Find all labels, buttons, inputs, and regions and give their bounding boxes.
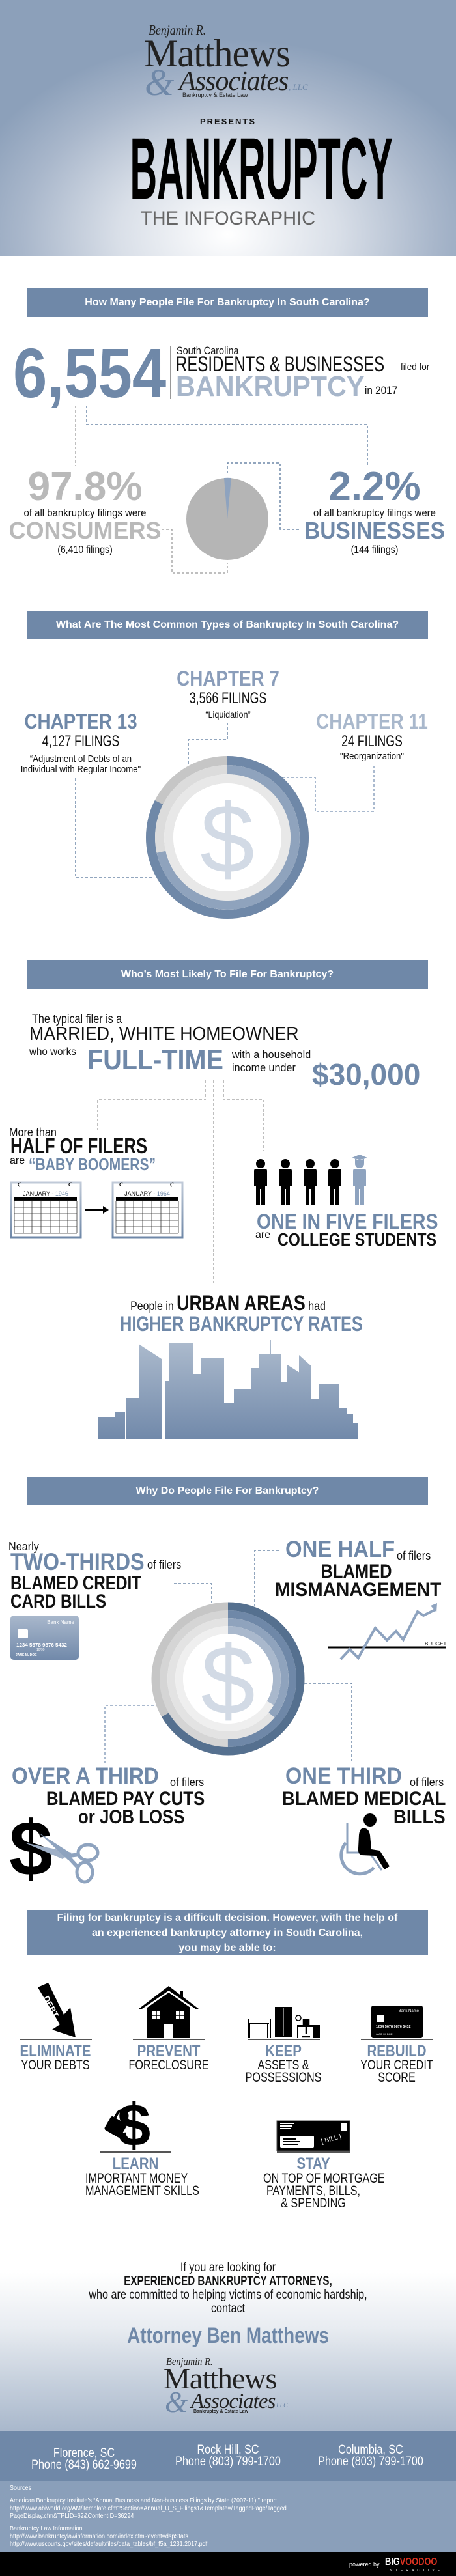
icon: credit card: Bank Name <box>47 1619 74 1625</box>
connectors section 2 <box>75 723 375 878</box>
one half mismanagement: ONE HALF <box>285 1537 395 1562</box>
icon: budget chart: BUDGET <box>425 1641 446 1647</box>
college students: ONE IN FIVE FILERS <box>257 1210 438 1233</box>
sources: Bankruptcy Law Information <box>10 2525 83 2532</box>
icon: credit card: JANE M. DOE <box>16 1653 37 1657</box>
icon: black credit card: 1234 5678 9876 5432 <box>376 2025 411 2029</box>
one third medical <box>282 1763 446 1828</box>
offices band <box>0 2431 456 2481</box>
two-thirds credit card <box>8 1540 181 1612</box>
chapter 7: CHAPTER 7 <box>177 667 279 690</box>
benefit labels row 1: ELIMINATE <box>20 2042 91 2060</box>
typical filer text: who works <box>29 1046 76 1057</box>
benefit labels row 1: PREVENT <box>137 2042 200 2060</box>
chapter 11: CHAPTER 11 <box>316 710 428 733</box>
skyline <box>98 1340 358 1439</box>
benefit labels row 2: PAYMENTS, BILLS, <box>266 2183 360 2198</box>
one half mismanagement: MISMANAGEMENT <box>275 1579 441 1601</box>
one half mismanagement: BLAMED <box>321 1561 392 1582</box>
closing text: contact <box>211 2302 245 2316</box>
connectors section 4 <box>104 1550 352 1763</box>
baby boomers <box>9 1126 156 1174</box>
icon: black credit card <box>361 2006 433 2040</box>
footer logo: , LLC <box>273 2402 288 2409</box>
one half mismanagement: of filers <box>397 1549 431 1562</box>
chapter 11 <box>316 710 428 762</box>
two-thirds credit card: BLAMED CREDIT <box>10 1573 141 1594</box>
one half mismanagement <box>275 1537 442 1601</box>
over a third pay cuts: OVER A THIRD <box>12 1763 159 1789</box>
icon: dollar and scissors <box>9 1805 99 1892</box>
college students <box>255 1210 438 1250</box>
text: residents & businesses: in 2017 <box>365 384 397 397</box>
benefit labels row 2: MANAGEMENT SKILLS <box>85 2183 199 2198</box>
benefit labels row 2: ON TOP OF MORTGAGE <box>263 2171 385 2186</box>
benefit labels row 1: FORECLOSURE <box>128 2058 209 2073</box>
stat: consumers <box>8 464 162 555</box>
icon: locked dollar: $ <box>117 2092 150 2159</box>
connectors section 3 <box>97 1080 264 1283</box>
icon: house <box>133 1986 205 2040</box>
college students: are <box>255 1229 270 1240</box>
baby boomers: are <box>10 1155 25 1166</box>
icon: debt arrow <box>20 1983 92 2040</box>
icon: budget chart <box>328 1603 447 1660</box>
band: types <box>27 611 428 639</box>
benefit labels row 2: STAY <box>296 2155 330 2173</box>
benefit labels row 2: & SPENDING <box>281 2196 346 2211</box>
chapter 13: 4,127 FILINGS <box>42 733 119 750</box>
chapter 13: “Adjustment of Debts of an <box>30 753 132 764</box>
icon: credit card: 10/99 <box>36 1648 45 1652</box>
typical filer text: FULL-TIME <box>87 1044 223 1076</box>
stat: consumers: CONSUMERS <box>8 517 162 544</box>
footer logo: Benjamin R. <box>166 2355 212 2368</box>
reasons donut chart: $ <box>201 1625 255 1735</box>
band: help <box>27 1910 428 1955</box>
icon: debt arrow: DEBT <box>41 1994 61 2019</box>
icon: credit card: 1234 5678 9876 5432 <box>16 1642 67 1648</box>
icon: bill envelope: [ BILL ] <box>321 2133 342 2146</box>
icon: locked dollar <box>100 2092 171 2159</box>
benefit labels row 1 <box>20 2042 433 2085</box>
offices band: Phone (803) 799-1700 <box>318 2455 423 2469</box>
chapter 11: "Reorganization" <box>340 751 404 762</box>
urban areas text <box>120 1291 363 1336</box>
closing text: If you are looking for <box>180 2261 276 2275</box>
offices band: Columbia, SC <box>338 2443 403 2457</box>
icon: bill envelope <box>276 2120 350 2153</box>
one third medical: BLAMED MEDICAL <box>282 1788 446 1810</box>
band: who: Who’s Most Likely To File For Bankruptcy? <box>121 969 334 980</box>
band: help: Filing for bankruptcy is a difficult decision. However, with the help of <box>57 1912 397 1924</box>
stat: businesses: (144 filings) <box>351 544 398 555</box>
one third medical: of filers <box>410 1776 444 1789</box>
text: residents & businesses: BANKRUPTCY <box>176 371 365 402</box>
urban areas text: People in URBAN AREAS had <box>130 1291 326 1315</box>
sources: PageDisplay.cfm&TPLID=62&ContentID=36294 <box>10 2513 134 2520</box>
footer bar: BIGVOODOO <box>385 2556 437 2568</box>
offices band: Phone (843) 662-9699 <box>31 2458 137 2472</box>
calendars: JANUARY - 1946 <box>23 1190 68 1197</box>
sources: http://www.abiworld.org/AM/Template.cfm?Section=Annual_U_S_Filings1&Template=/TaggedPage/Tagged <box>10 2505 287 2512</box>
typical filer text: The typical filer is a <box>32 1013 122 1026</box>
two-thirds credit card: of filers <box>147 1558 181 1571</box>
icon: dollar and scissors: $ <box>9 1805 53 1892</box>
text: residents & businesses: RESIDENTS & BUSINESSES <box>176 352 384 376</box>
band: types: What Are The Most Common Types of Bankruptcy In South Carolina? <box>56 619 399 630</box>
footer logo: Associates <box>191 2390 275 2413</box>
two-thirds credit card: TWO-THIRDS <box>10 1548 145 1575</box>
icon: furniture <box>248 2007 320 2040</box>
typical filer text: MARRIED, WHITE HOMEOWNER <box>29 1024 299 1044</box>
chapter 7 <box>177 667 279 720</box>
attorney name: Attorney Ben Matthews <box>127 2323 329 2348</box>
presents: PRESENTS <box>200 117 256 126</box>
logo: Matthews & Associates: Associates <box>179 66 288 96</box>
stat: businesses <box>304 464 445 555</box>
stat: businesses: BUSINESSES <box>304 517 445 544</box>
over a third pay cuts: of filers <box>170 1776 204 1789</box>
offices band: Florence, SC <box>53 2446 115 2460</box>
two-thirds credit card: Nearly <box>8 1540 39 1553</box>
baby boomers: More than <box>9 1126 57 1139</box>
stat: businesses: 2.2% <box>328 464 421 509</box>
band: why <box>27 1477 428 1505</box>
footer bar: powered by <box>349 2561 380 2568</box>
offices band: Phone (803) 799-1700 <box>175 2455 281 2469</box>
band: how many: How Many People File For Bankruptcy In South Carolina? <box>85 297 370 308</box>
two-thirds credit card: CARD BILLS <box>10 1591 106 1612</box>
typical filer text <box>29 1013 420 1091</box>
calendars <box>10 1181 184 1239</box>
benefit labels row 2: LEARN <box>113 2155 158 2173</box>
chapter 11: 24 FILINGS <box>341 733 403 750</box>
footer logo: Matthews <box>164 2362 276 2395</box>
footer logo <box>164 2355 288 2418</box>
typical filer text: with a household <box>232 1048 311 1061</box>
footer bar <box>0 2552 456 2576</box>
chapter 13: Individual with Regular Income" <box>21 764 141 775</box>
benefit labels row 1: YOUR DEBTS <box>21 2058 90 2073</box>
calendars: JANUARY - 1964 <box>124 1190 170 1197</box>
coin chart <box>146 756 309 919</box>
icon: credit card <box>10 1616 79 1660</box>
chapter 7: “Liquidation” <box>205 709 251 720</box>
band: help: an experienced bankruptcy attorney in South Carolina, <box>92 1927 363 1939</box>
subtitle: THE INFOGRAPHIC <box>141 208 315 229</box>
sources: http://www.bankruptcylawinformation.com/index.cfm?event=dspStats <box>10 2533 188 2540</box>
pie chart <box>186 478 268 560</box>
closing text: EXPERIENCED BANKRUPTCY ATTORNEYS, <box>124 2275 332 2288</box>
college students: COLLEGE STUDENTS <box>278 1229 436 1250</box>
connectors section 1 <box>75 406 368 574</box>
closing text <box>89 2261 367 2316</box>
logo: Matthews & Associates: , LLC <box>289 82 308 92</box>
icon: five people <box>254 1155 367 1205</box>
typical filer text: $30,000 <box>312 1057 420 1091</box>
band: who <box>27 960 428 989</box>
footer bar: INTERACTIVE <box>386 2569 443 2573</box>
urban areas text: HIGHER BANKRUPTCY RATES <box>120 1312 363 1336</box>
logo: Matthews & Associates: Benjamin R. <box>149 22 206 38</box>
header background <box>0 0 456 256</box>
text: residents & businesses <box>176 344 430 402</box>
band: help: you may be able to: <box>178 1942 276 1953</box>
benefit labels row 1: POSSESSIONS <box>246 2070 321 2085</box>
stat: 6,554: 6,554 <box>13 333 166 412</box>
benefit labels row 1: REBUILD <box>367 2042 427 2060</box>
benefit labels row 1: YOUR CREDIT <box>360 2058 433 2073</box>
icon: black credit card: Bank Name <box>399 2009 420 2013</box>
typical filer text: income under <box>232 1061 296 1074</box>
over a third pay cuts <box>12 1763 205 1828</box>
baby boomers: HALF OF FILERS <box>10 1134 147 1158</box>
reasons donut chart <box>151 1602 305 1756</box>
closing text: who are committed to helping victims of economic hardship, <box>89 2288 367 2302</box>
benefit labels row 2 <box>85 2155 385 2211</box>
stat: consumers: (6,410 filings) <box>57 544 113 555</box>
logo: Matthews & Associates: & <box>145 61 174 104</box>
footer logo: & <box>165 2386 188 2418</box>
logo: Matthews & Associates <box>144 22 308 104</box>
one third medical: ONE THIRD <box>285 1763 402 1789</box>
text: residents & businesses: filed for <box>401 361 429 372</box>
benefit labels row 1: ASSETS & <box>257 2058 309 2073</box>
one third medical: BILLS <box>393 1806 446 1828</box>
baby boomers: “BABY BOOMERS” <box>29 1155 156 1174</box>
footer gradient background <box>0 2273 456 2431</box>
stat: businesses: of all bankruptcy filings were <box>313 507 436 519</box>
logo: Matthews & Associates: Bankruptcy & Estate Law <box>182 92 248 98</box>
sources: American Bankruptcy Institute’s “Annual Business and Non-business Filings by State (2007-11),” report <box>10 2497 277 2504</box>
stat: consumers: of all bankruptcy filings were <box>24 507 146 519</box>
chapter 13 <box>21 710 141 775</box>
sources <box>0 2481 456 2552</box>
title: BANKRUPTCY: BANKRUPTCY <box>130 120 393 217</box>
offices band: Rock Hill, SC <box>197 2443 259 2457</box>
footer logo: Bankruptcy & Estate Law <box>193 2409 248 2414</box>
coin chart: $ <box>200 784 255 893</box>
icon: black credit card: JANE M. DOE <box>376 2032 393 2036</box>
logo: Matthews & Associates: Matthews <box>144 32 290 75</box>
over a third pay cuts: BLAMED PAY CUTS <box>46 1788 205 1810</box>
chapter 13: CHAPTER 13 <box>24 710 137 733</box>
sources: Sources <box>10 2485 31 2492</box>
text: residents & businesses: South Carolina <box>177 344 239 357</box>
over a third pay cuts: or JOB LOSS <box>78 1806 184 1828</box>
stat: consumers: 97.8% <box>28 464 142 509</box>
sources: http://www.uscourts.gov/sites/default/files/data_tables/bf_f5a_1231.2017.pdf <box>10 2541 207 2548</box>
benefit labels row 1: SCORE <box>378 2070 416 2085</box>
icon: wheelchair <box>339 1813 390 1875</box>
benefit labels row 2: IMPORTANT MONEY <box>85 2171 188 2186</box>
chapter 7: 3,566 FILINGS <box>190 690 266 707</box>
band: how many <box>27 288 428 317</box>
band: why: Why Do People File For Bankruptcy? <box>136 1485 319 1496</box>
benefit labels row 1: KEEP <box>265 2042 302 2060</box>
